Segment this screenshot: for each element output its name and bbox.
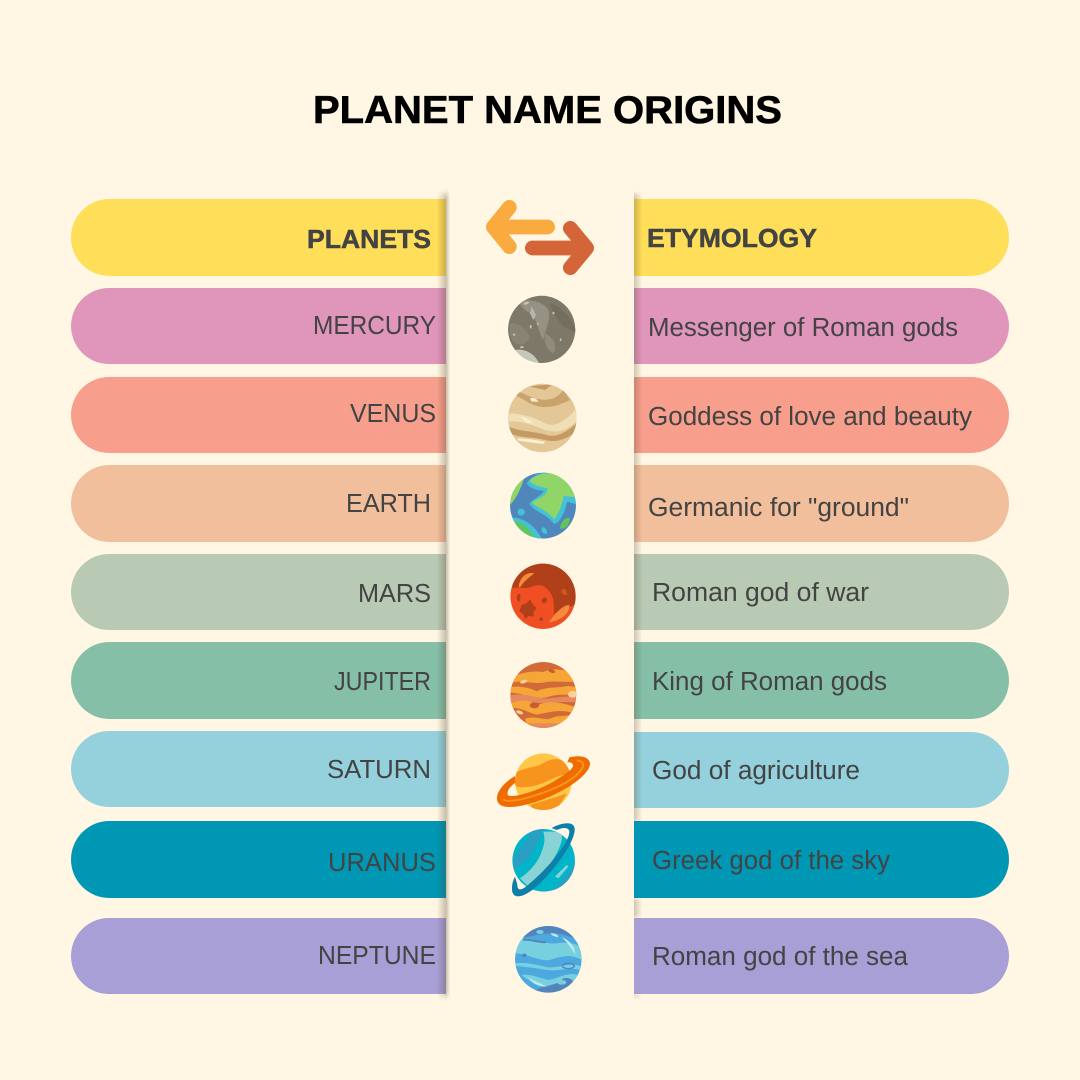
- row: Mars etymology: Roman god of war: [652, 579, 870, 607]
- row: Mercury: MERCURY: [313, 312, 436, 340]
- row: Saturn: [71, 731, 446, 807]
- row: Neptune: [71, 918, 446, 994]
- arrow: right pointing: [532, 228, 587, 268]
- row: Earth: [71, 465, 446, 542]
- icon: Jupiter planet: [509, 662, 578, 730]
- header bar: planets: [71, 199, 446, 276]
- row: Mercury: [71, 288, 446, 364]
- row: Earth etymology: Germanic for "ground": [648, 494, 909, 522]
- icon: Neptune planet: [515, 923, 582, 997]
- row: Venus: [71, 377, 446, 453]
- row: Mars: [71, 554, 446, 630]
- row: Neptune etymology: [634, 918, 1009, 994]
- row: Earth: EARTH: [346, 490, 431, 518]
- icon: Earth planet: [510, 472, 578, 542]
- row: Neptune: NEPTUNE: [318, 942, 436, 970]
- row: Mercury etymology: [634, 288, 1009, 364]
- row: Saturn: SATURN: [327, 756, 431, 784]
- icon: Uranus planet: [512, 823, 577, 896]
- row: Venus: VENUS: [350, 400, 436, 428]
- row: Uranus etymology: [634, 821, 1009, 898]
- row: Mars etymology: [634, 554, 1009, 630]
- row: Uranus: URANUS: [328, 849, 436, 877]
- row: Mars: MARS: [358, 580, 431, 608]
- row: Venus etymology: [634, 377, 1009, 453]
- row: Jupiter etymology: [634, 642, 1009, 719]
- row: Saturn etymology: God of agriculture: [652, 757, 860, 785]
- row: Saturn etymology: [634, 732, 1009, 808]
- header bar: etymology: [634, 199, 1009, 276]
- row: Uranus: [71, 821, 446, 898]
- row: Mercury etymology: Messenger of Roman gods: [648, 314, 958, 342]
- row: Jupiter etymology: King of Roman gods: [652, 668, 887, 696]
- header bar: planets: PLANETS: [307, 226, 431, 254]
- title: PLANET NAME ORIGINS: [313, 89, 782, 132]
- row: Jupiter: JUPITER: [334, 668, 431, 696]
- panel: etymology column: [634, 199, 1009, 994]
- row: Uranus etymology: Greek god of the sky: [652, 847, 890, 875]
- panel: planets column: [71, 199, 446, 994]
- row: Earth etymology: [634, 465, 1009, 542]
- arrow: left pointing: [493, 207, 548, 247]
- row: Jupiter: [71, 642, 446, 719]
- icon: Saturn planet: [497, 753, 590, 810]
- icon: exchange arrows: [493, 207, 587, 268]
- row: Venus etymology: Goddess of love and beauty: [648, 403, 972, 431]
- row: Neptune etymology: Roman god of the sea: [652, 943, 909, 971]
- center strip shadows: [437, 194, 642, 997]
- header bar: etymology: ETYMOLOGY: [647, 225, 817, 253]
- icon: Mercury planet: [508, 296, 577, 365]
- icon: Venus planet: [507, 384, 578, 452]
- icon: Mars planet: [510, 563, 577, 629]
